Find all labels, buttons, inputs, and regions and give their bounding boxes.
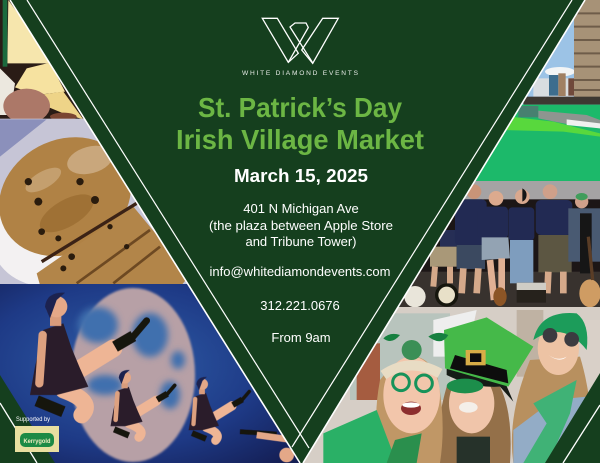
- logo mark: [262, 18, 338, 63]
- address: (the plaza between Apple Store: [209, 218, 393, 233]
- address: 401 N Michigan Ave: [243, 201, 359, 216]
- title: Irish Village Market: [176, 124, 424, 155]
- photo: festival friends in green: [300, 307, 600, 463]
- address: and Tribune Tower): [245, 234, 357, 249]
- lower-right corner band: [545, 373, 600, 463]
- date: March 15, 2025: [234, 166, 368, 186]
- photo: band group: [400, 181, 600, 308]
- sponsor logo: Kerrygold: [24, 439, 51, 445]
- moon: [71, 288, 195, 462]
- title: [176, 92, 424, 155]
- photo: Irish dancers and moon: [0, 284, 310, 463]
- logo wordmark: WHITE DIAMOND EVENTS: [242, 70, 359, 77]
- musicians: [404, 184, 600, 307]
- friend middle: [438, 317, 533, 463]
- logo: White Diamond Events: [242, 18, 359, 77]
- title: St. Patrick’s Day: [198, 92, 402, 123]
- lower-left corner band: [0, 375, 55, 463]
- address: [209, 201, 393, 249]
- sponsor: Supported by Kerrygold: [15, 416, 59, 452]
- photo: soda bread: [0, 118, 187, 284]
- friend right: [512, 313, 593, 463]
- friend left: [323, 333, 448, 463]
- photo: green Chicago river: [476, 0, 600, 181]
- phone: 312.221.0676: [260, 298, 340, 313]
- email: info@whitediamondevents.com: [210, 264, 390, 279]
- opening time: From 9am: [271, 330, 331, 345]
- sponsor label: Supported by: [16, 416, 51, 423]
- photo: cheese board: [0, 0, 87, 123]
